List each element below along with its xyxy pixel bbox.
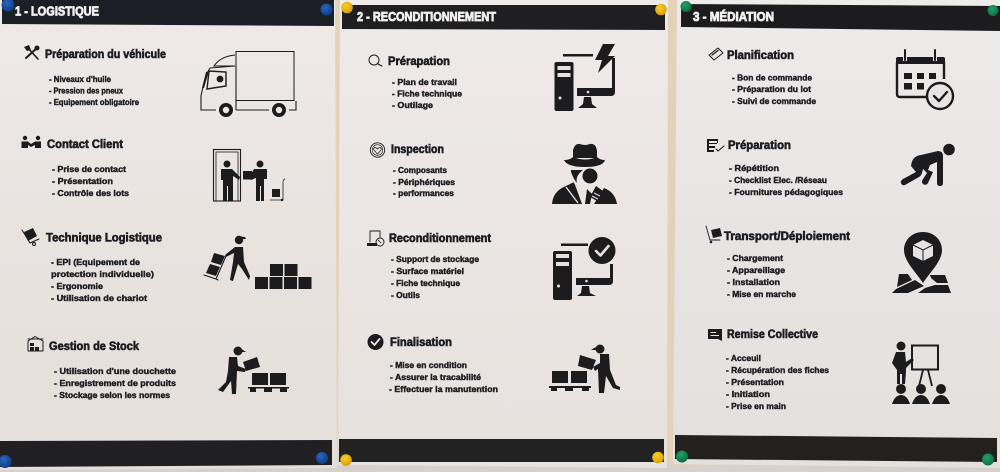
icon: laptop and wrench: [367, 231, 384, 246]
heading: Préparation du véhicule: Préparation du véhicule: [45, 49, 166, 61]
panel: 2 - Reconditionnement: [338, 0, 668, 468]
text block: reconditionnement list: [391, 254, 479, 300]
text block: remise list: [726, 353, 829, 411]
icon: truck: [201, 52, 296, 117]
text block: véhicule list: - Pression des pneux: [49, 86, 123, 96]
heading: 2 - Reconditionnement: 2 - RECONDITIONNEMENT: [357, 10, 496, 24]
text block: transport list: - Installation: [727, 277, 780, 287]
panel: 1 - Logistique: [0, 0, 337, 470]
text block: contact list: - Présentation: [52, 176, 113, 186]
pins: green: [676, 1, 998, 466]
text block: stock list: [54, 366, 176, 400]
text block: inspection list: - Périphériques: [393, 177, 455, 187]
text block: technique list: [51, 257, 154, 303]
heading: Prérapation: Prérapation: [388, 56, 450, 68]
icon: magnifier: [369, 55, 382, 66]
text block: contact list: [52, 164, 129, 198]
icon: worker unloading pallet: [549, 344, 620, 393]
text block: stock list: - Stockage selon les normes: [54, 390, 170, 400]
text block: préparation list: - Fournitures pédagogiques: [729, 187, 843, 197]
icon: calendar with check: [896, 49, 953, 109]
icon: teacher with audience: [892, 342, 950, 404]
text block: reconditionnement list: - Fiche technique: [391, 278, 460, 288]
text block: technique list: - Utilisation de chariot: [51, 293, 147, 303]
icon: computer with check: [553, 237, 616, 300]
text block: contact list: - Prise de contact: [52, 164, 126, 174]
text block: finalisation list: [389, 360, 498, 394]
heading: Finalisation: Finalisation: [390, 337, 452, 349]
icon: check circle: [368, 334, 384, 350]
text block: inspection list: [393, 165, 455, 198]
heading: Transport/Déploiement: Transport/Déploiement: [724, 231, 850, 243]
text block: transport list: - Chargement: [727, 253, 783, 263]
text block: remise list: - Initiation: [726, 389, 770, 399]
text block: préparation list: - Répétition: [729, 163, 779, 173]
text block: remise list: - Prise en main: [726, 401, 786, 411]
heading: 3 - Médiation: 3 - MÉDIATION: [693, 9, 774, 24]
heading: 1 - Logistique: 1 - LOGISTIQUE: [15, 4, 99, 18]
heading: Planification: Planification: [727, 50, 794, 62]
text block: reconditionnement list: - Surface matériel: [391, 266, 464, 276]
text block: stock list: - Utilisation d'une douchette: [54, 366, 176, 376]
icon: worker with trolley and boxes: [204, 236, 312, 289]
text block: véhicule list: - Equipement obligatoire: [49, 97, 139, 107]
pins: yellow: [340, 2, 667, 466]
text block: finalisation list: - Effectuer la manutention: [389, 384, 498, 394]
heading: Contact Client: Contact Client: [47, 139, 123, 151]
text block: technique list: protection individuelle): [51, 269, 154, 279]
icon: worker loading pallet: [218, 346, 289, 394]
text block: planification list: [732, 72, 816, 106]
icon: dolly: [22, 228, 39, 246]
icon: cart: [706, 226, 722, 243]
text block: remise list: - Présentation: [726, 377, 784, 387]
text block: contact list: - Contrôle des lots: [52, 188, 129, 198]
text block: transport list: - Mise en marche: [727, 289, 796, 299]
text block: planification list: - Préparation du lot: [732, 84, 811, 94]
icon: ticket: [709, 48, 723, 60]
text block: prérapation list: - Outilage: [392, 100, 433, 110]
icon: tools: [24, 45, 40, 59]
text block: reconditionnement list: - Outils: [391, 290, 420, 300]
text block: reconditionnement list: - Support de stockage: [391, 254, 479, 264]
text block: prérapation list: - Fiche technique: [392, 88, 462, 98]
text block: inspection list: - Composants: [393, 165, 447, 175]
text block: transport list: [727, 253, 796, 299]
heading: Inspection: Inspection: [391, 144, 444, 156]
icon: handshake: [22, 136, 41, 148]
icon: delivery at door: [214, 150, 285, 201]
icon: map pin with box: [892, 232, 951, 293]
text block: inspection list: - performances: [393, 188, 454, 198]
text block: véhicule list: - Niveaux d'huile: [49, 74, 111, 84]
text block: préparation list: [729, 163, 843, 197]
heading: Reconditionnement: Reconditionnement: [389, 233, 491, 245]
icon: heart in circle: [370, 143, 385, 157]
text block: prérapation list: - Plan de travail: [392, 77, 457, 87]
text block: préparation list: - Checklist Elec. /Réseau: [729, 175, 827, 185]
text block: véhicule list: [49, 74, 139, 107]
icon: crouching figure: [901, 144, 955, 186]
heading: Remise Collective: Remise Collective: [727, 329, 818, 341]
icon: warehouse: [28, 336, 43, 351]
pins: blue: [0, 0, 332, 468]
text block: remise list: - Acceuil: [726, 353, 761, 363]
text block: planification list: - Suivi de commande: [732, 96, 816, 106]
text block: planification list: - Bon de commande: [732, 72, 812, 82]
text block: transport list: - Appareillage: [727, 265, 785, 275]
icon: computer with lightning: [554, 44, 615, 111]
heading: Préparation: Préparation: [728, 140, 791, 152]
heading: Technique Logistique: Technique Logistique: [46, 232, 162, 244]
text block: prérapation list: [392, 77, 462, 110]
panel: 3 - Médiation: [673, 0, 1000, 468]
text block: finalisation list: - Assurer la tracabilité: [390, 372, 481, 382]
text block: technique list: - EPI (Equipement de: [51, 257, 140, 267]
icon: checklist: [707, 139, 724, 152]
icon: chat bubble: [708, 329, 722, 341]
icon: detective: [552, 144, 617, 204]
text block: finalisation list: - Mise en condition: [390, 360, 467, 370]
heading: Gestion de Stock: Gestion de Stock: [49, 341, 140, 353]
text block: technique list: - Ergonomie: [51, 281, 103, 291]
text block: stock list: - Enregistrement de produits: [54, 378, 176, 388]
text block: remise list: - Récupération des fiches: [726, 365, 829, 375]
